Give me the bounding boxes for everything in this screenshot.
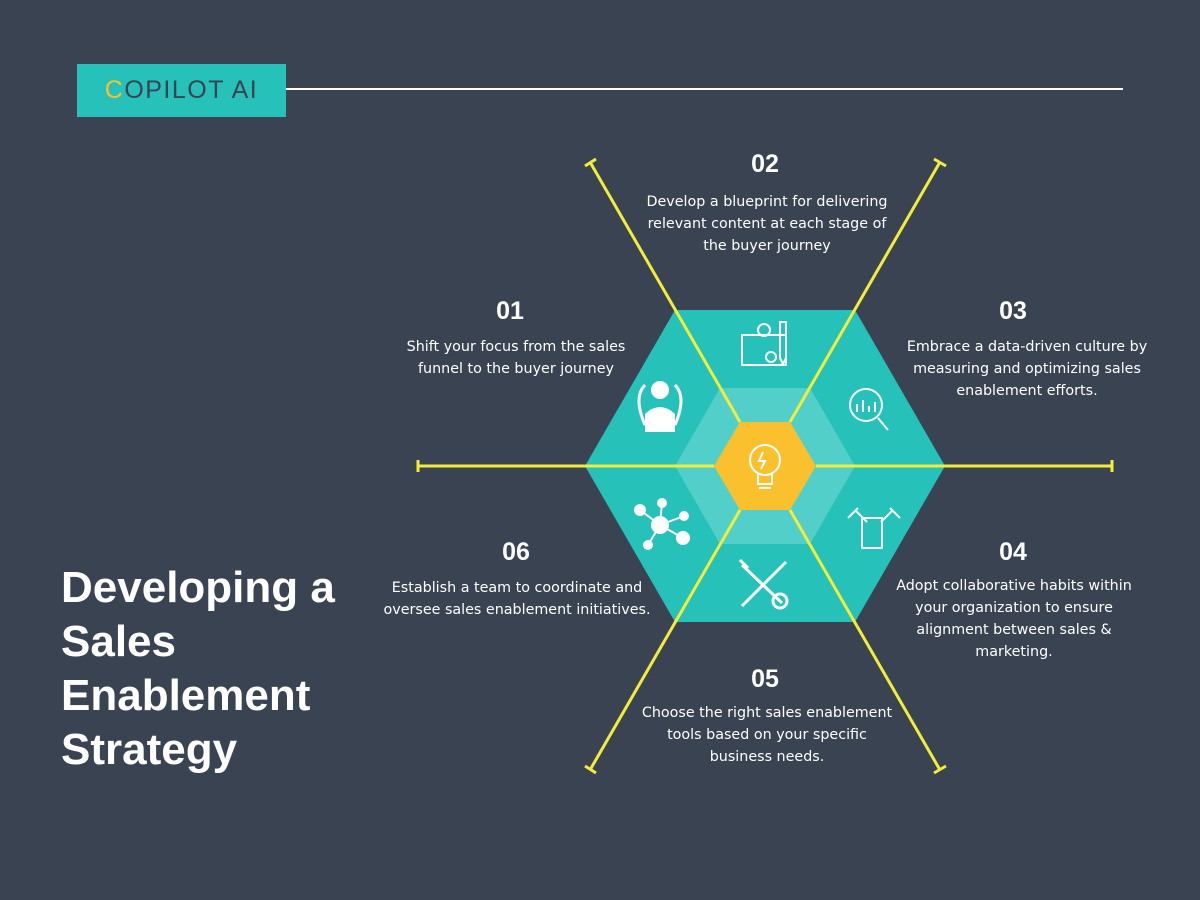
icon: blueprint: [742, 322, 786, 365]
step 03: 03: [999, 297, 1027, 325]
icon: magnifier chart: [850, 389, 888, 430]
text: Establish a team to coordinate and oversee sales enablement initiatives.: [383, 580, 650, 618]
step 05: 05: [751, 665, 779, 693]
text: Shift your focus from the sales funnel to the buyer journey: [407, 339, 625, 377]
step 06: 06: [502, 538, 530, 566]
title: Strategy: [61, 725, 237, 774]
title: Sales: [61, 617, 176, 666]
title: Enablement: [61, 671, 310, 720]
icon: hands: [848, 508, 900, 548]
title: [61, 563, 336, 774]
step 01: 01: [496, 297, 524, 325]
axis lines: [418, 159, 1112, 773]
title: Developing a: [61, 563, 335, 612]
text: Develop a blueprint for delivering relevant content at each stage of the buyer journey: [646, 194, 888, 254]
icon: network: [635, 499, 689, 549]
step 04: 04: [999, 538, 1027, 566]
header rule: [286, 88, 1123, 90]
logo: [77, 64, 286, 117]
icon: people money: [645, 381, 675, 432]
middle hexagon: [675, 388, 855, 544]
step 02: 02: [751, 150, 779, 178]
logo: COPILOT AI: [105, 76, 258, 104]
center hexagon: [714, 422, 816, 510]
icon: tools: [740, 560, 787, 608]
icon: center bulb: [750, 445, 780, 488]
text: Adopt collaborative habits within your organization to ensure alignment between sales & marketing.: [896, 578, 1132, 660]
text: Choose the right sales enablement tools based on your specific business needs.: [642, 705, 892, 765]
text: Embrace a data-driven culture by measuring and optimizing sales enablement efforts.: [907, 339, 1147, 399]
outer hexagon: [585, 310, 945, 622]
